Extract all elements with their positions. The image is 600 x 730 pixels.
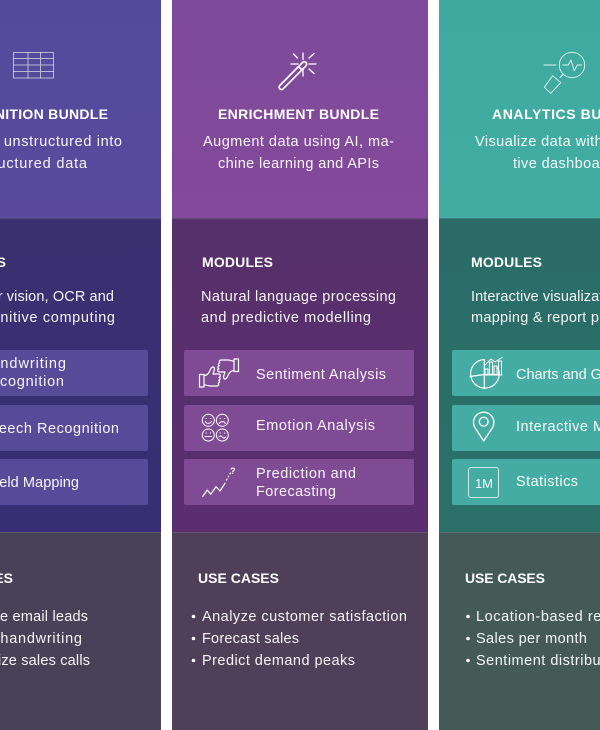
heading: modules: MODULES: [471, 254, 542, 270]
module: prediction and forecasting: [184, 459, 414, 505]
use cases list: analytics: Sales per month: [476, 631, 587, 647]
use cases band: enrichment: [172, 532, 428, 730]
module: speech recognition: [0, 405, 148, 451]
use cases list: enrichment: Analyze customer satisfaction: [202, 609, 407, 625]
heading: use cases: USE CASES: [198, 570, 279, 586]
panel: enrichment bundle: [172, 0, 428, 730]
band divider lines: [0, 218, 600, 532]
modules text: enrichment: and predictive modelling: [201, 310, 371, 326]
icon: pie and bar chart: [470, 358, 502, 388]
icon: emotion faces: [202, 414, 228, 441]
modules band: analytics: [439, 218, 600, 532]
description: enrichment: [203, 134, 394, 172]
module: interactive maps: [452, 405, 600, 451]
modules text: recognition: [0, 289, 115, 326]
module: emotion analysis: Emotion Analysis: [256, 418, 375, 434]
icon: thumbs up and down: [200, 359, 238, 387]
modules text: enrichment: [201, 289, 396, 326]
header band: recognition: [0, 0, 161, 218]
module: sentiment analysis: [184, 350, 414, 396]
module: prediction and forecasting: Prediction and: [256, 466, 356, 482]
modules text: analytics: [471, 289, 600, 326]
header band: analytics: [439, 0, 600, 218]
module: field mapping: [0, 459, 148, 505]
use cases list: enrichment: Predict demand peaks: [202, 653, 355, 669]
icon: magic wand: [279, 53, 316, 90]
description: recognition: [0, 134, 122, 172]
heading: enrichment bundle: ENRICHMENT BUNDLE: [218, 106, 379, 122]
use cases band: analytics: [439, 532, 600, 730]
module: statistics: Statistics: [516, 474, 578, 490]
icon: map pin: [473, 412, 494, 441]
heading: modules: MODULES: [202, 254, 273, 270]
header band: enrichment: [172, 0, 428, 218]
module: prediction and forecasting: Forecasting: [256, 484, 336, 500]
use cases list: enrichment: Forecast sales: [202, 631, 299, 647]
module: charts and graphs: [452, 350, 600, 396]
description: analytics: [475, 134, 600, 172]
panel: analytics bundle: [439, 0, 600, 730]
description: enrichment: chine learning and APIs: [218, 156, 379, 172]
panel: recognition bundle: [0, 0, 161, 730]
icon: 1M stat box: [468, 468, 498, 498]
icon: 1M stat box: 1M: [475, 476, 493, 491]
modules band: enrichment: [172, 218, 428, 532]
modules band: recognition: [0, 218, 161, 532]
icon: forecast line: [203, 473, 230, 496]
modules text: enrichment: Natural language processing: [201, 289, 396, 305]
module: statistics: [452, 459, 600, 505]
heading: use cases: USE CASES: [465, 570, 545, 586]
module: handwriting recognition: [0, 350, 148, 396]
icon: question mark: ?: [230, 466, 236, 476]
module: sentiment analysis: Sentiment Analysis: [256, 367, 386, 383]
use cases list: analytics: [466, 609, 600, 669]
use cases band: recognition: [0, 532, 161, 730]
use cases list: recognition: [0, 609, 90, 669]
icon: table: [14, 52, 54, 78]
icon: magnifier with pulse: [544, 52, 585, 93]
module: emotion analysis: [184, 405, 414, 451]
use cases list: enrichment: [192, 609, 407, 669]
description: enrichment: Augment data using AI, ma-: [203, 134, 394, 150]
